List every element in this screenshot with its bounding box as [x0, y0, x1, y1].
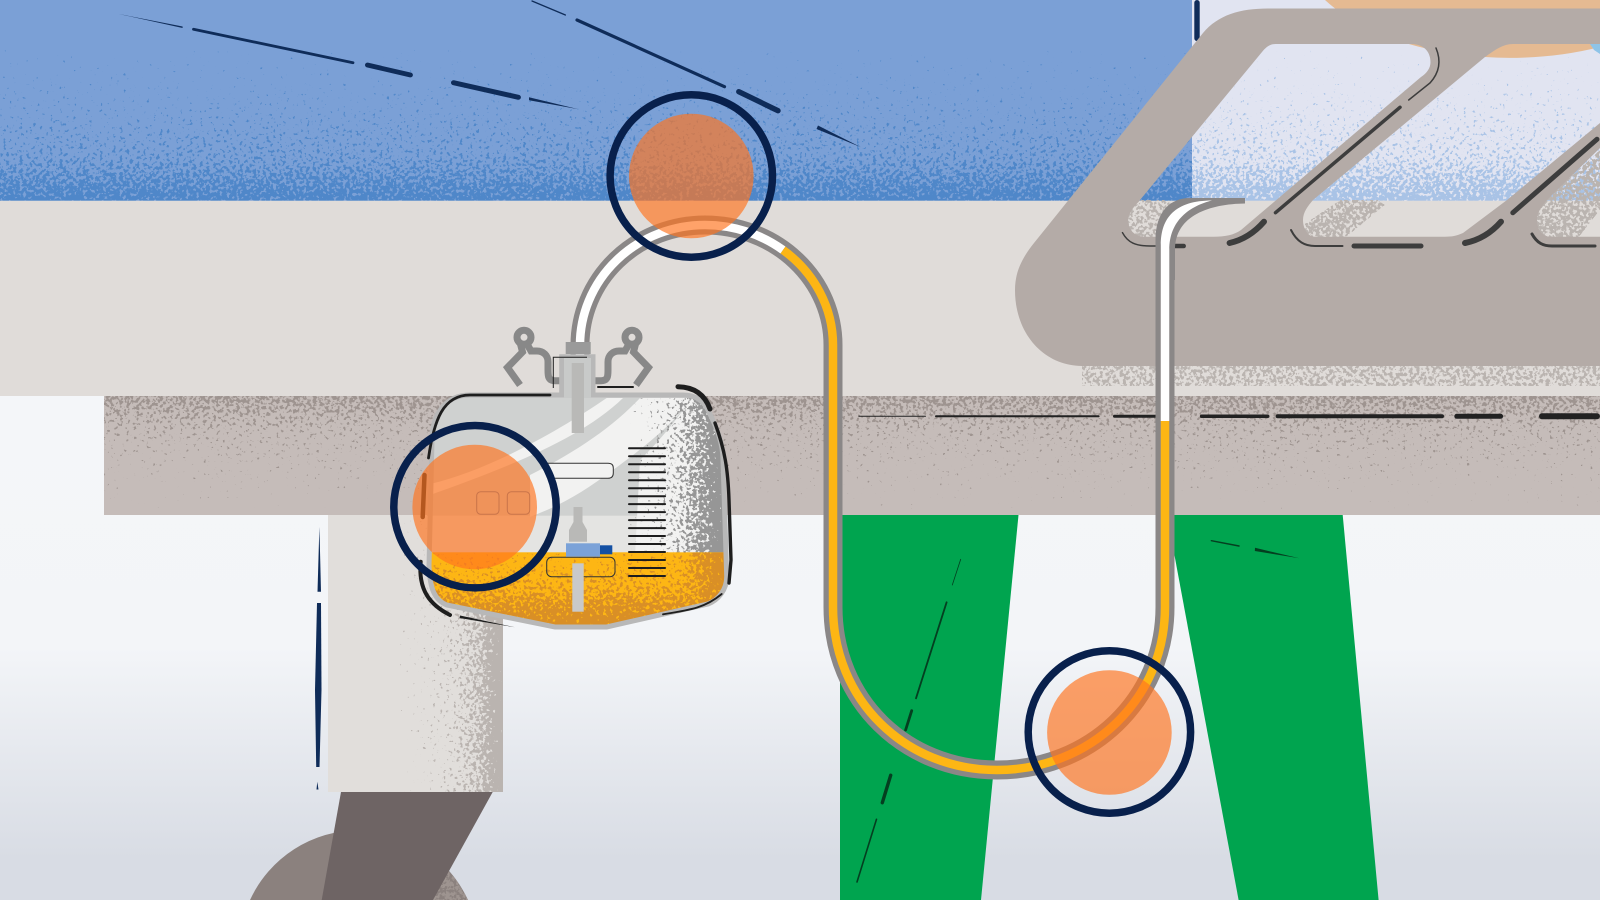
measuring scale ticks — [629, 448, 665, 576]
bag body — [429, 357, 727, 627]
shadow grain on wall under rail and in rail openings — [1082, 150, 1600, 386]
lower label window — [547, 557, 615, 577]
background: room floor gradient — [0, 396, 1600, 900]
dashes on bed frame — [859, 415, 1597, 417]
mattress band — [0, 201, 1600, 396]
blue clamp — [566, 543, 612, 557]
sketch lines on blue wall — [119, 1, 861, 147]
sky-blue wall panel with grain — [0, 0, 1192, 201]
bag contents clipped to body — [425, 398, 730, 630]
bag sketch outline — [420, 357, 731, 627]
wheel — [250, 830, 468, 900]
bag outline — [429, 357, 727, 627]
sketch line left of leg — [315, 527, 322, 790]
wheel strut — [322, 792, 493, 900]
highlight circle: bottom of tube — [1028, 651, 1191, 813]
drain stem — [572, 563, 584, 612]
green leg sketch marks — [857, 541, 1299, 882]
hanger clips — [508, 330, 648, 385]
highlight circle: bag — [394, 426, 556, 588]
forearm skin — [1325, 0, 1600, 58]
bed frame base with grain — [104, 396, 1600, 515]
neck connector — [564, 342, 591, 433]
right green trouser leg — [1167, 515, 1379, 900]
drainage bag — [420, 330, 731, 630]
left green trouser leg — [840, 515, 1018, 900]
window panel with grain — [1192, 0, 1600, 201]
highlight circle: top of tube — [610, 95, 772, 257]
sampling bottle — [569, 507, 587, 542]
bed leg column — [328, 515, 503, 792]
sketch line at window edge — [1194, 0, 1200, 41]
bed rail — [1015, 8, 1600, 366]
catheter tube — [580, 198, 1245, 770]
dashes on bed rail — [1122, 48, 1597, 246]
top label window — [547, 463, 613, 478]
